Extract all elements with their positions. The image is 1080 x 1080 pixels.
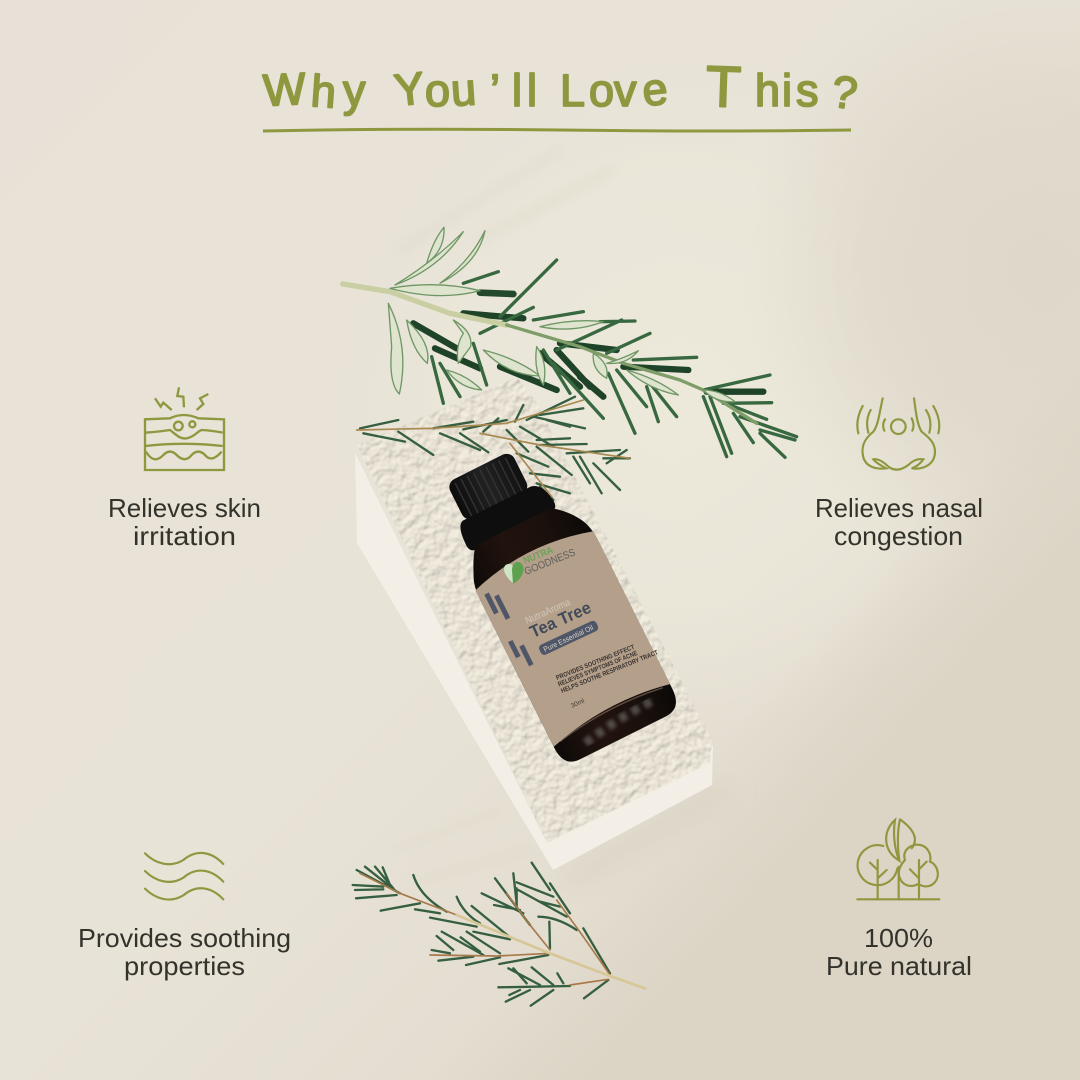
label logo heart [504, 562, 523, 584]
caption [815, 493, 983, 551]
feature: relieves nasal congestion [815, 398, 983, 551]
title: Why You’ll Love T his? [262, 54, 860, 120]
shadows cast by the sprigs and the block [395, 150, 720, 880]
caption: Relieves nasal [815, 493, 983, 523]
caption: Relieves skin [108, 493, 261, 523]
feature: relieves skin irritation [108, 387, 261, 551]
icon: nose [857, 398, 939, 470]
bottom tea tree sprig [353, 863, 645, 1006]
label product name: NutraAroma [524, 597, 572, 627]
label brand name: GOODNESS [523, 546, 577, 578]
essential oil bottle [427, 434, 682, 767]
caption [108, 493, 261, 551]
caption: Provides soothing [78, 923, 291, 953]
caption: properties [124, 951, 245, 981]
caption: 100% [864, 923, 933, 953]
label benefits text: RELIEVES SYMPTOMS OF ACNE [557, 650, 639, 688]
tea tree sprig on the block [357, 397, 630, 500]
icon: skin layers [145, 387, 224, 470]
label benefits text: HELPS SOOTHE RESPIRATORY TRACT [560, 649, 659, 695]
glass base reflection [557, 684, 670, 753]
kraft label [471, 522, 672, 747]
white stone block [355, 377, 713, 870]
large rosemary sprig [343, 227, 797, 457]
bottle cap [446, 451, 530, 522]
bottle collar [456, 480, 558, 553]
caption [826, 923, 972, 981]
caption: congestion [834, 521, 963, 551]
label volume: 30ml [570, 697, 586, 710]
icon: trees and leaf [857, 819, 939, 899]
title underline [263, 129, 851, 131]
label benefits text: PROVIDES SOOTHING EFFECT [555, 644, 636, 682]
amber glass body [457, 495, 682, 767]
label product name: Tea Tree [527, 598, 594, 642]
label pill: pure essential oil: Pure Essential Oil [542, 623, 595, 654]
caption: irritation [133, 521, 236, 551]
feature: 100% pure natural [826, 819, 972, 981]
feature: provides soothing properties [78, 853, 291, 981]
icon: waves [145, 853, 223, 900]
label side stripes [484, 589, 534, 670]
caption: Pure natural [826, 951, 972, 981]
label brand name: NUTRA [522, 545, 555, 567]
caption [78, 923, 291, 981]
